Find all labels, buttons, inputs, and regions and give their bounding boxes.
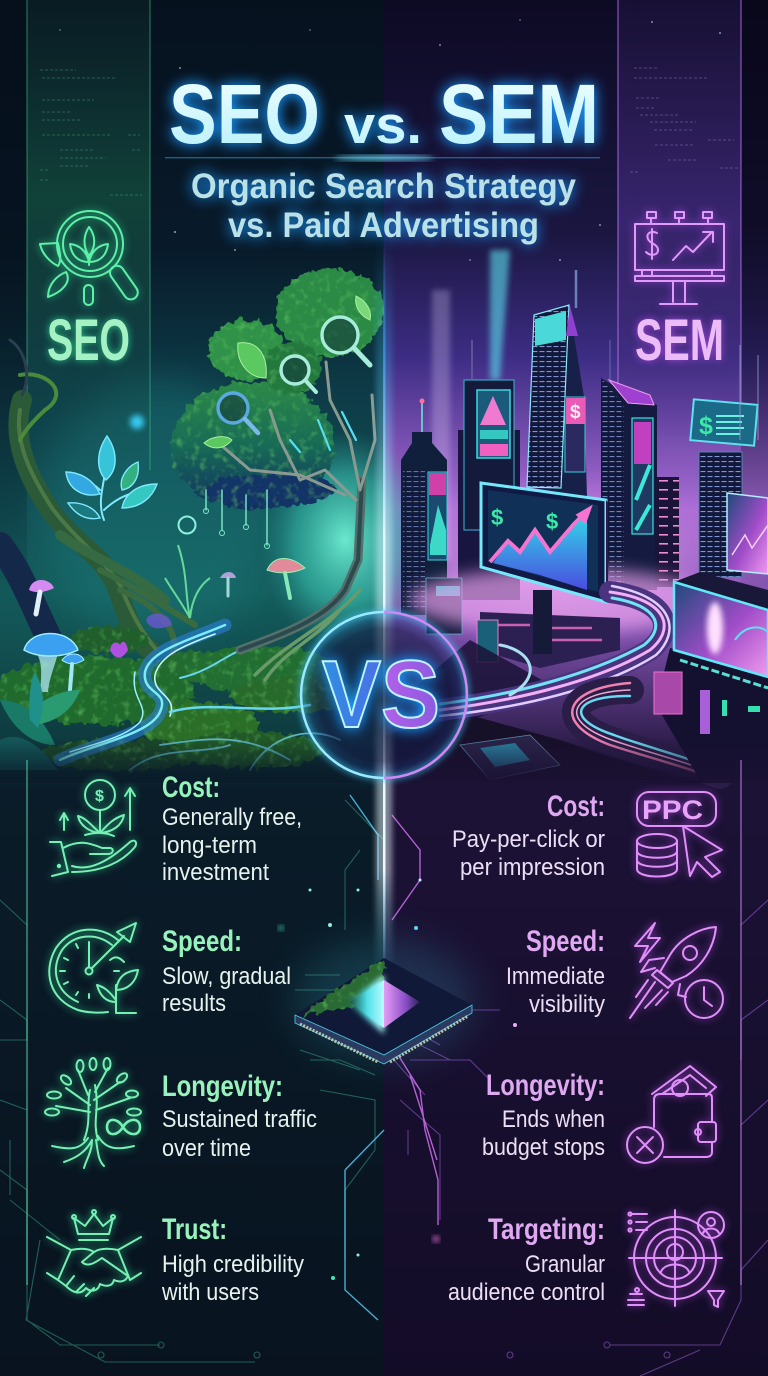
row: SEO longevity bbox=[45, 1058, 317, 1168]
text: SEO trust: with users bbox=[161, 1279, 259, 1306]
icon: handshake with crown bbox=[47, 1210, 141, 1296]
icon: PPC button, coins and cursor bbox=[637, 792, 722, 877]
circuit traces: right bright violet bbox=[392, 815, 438, 1225]
heading: SEM targeting: Targeting: bbox=[488, 1213, 605, 1246]
soft fade from scene into lower panels bbox=[0, 738, 768, 783]
corner tower with neon sign bbox=[601, 340, 679, 590]
heading: SEM speed: Speed: bbox=[526, 925, 605, 958]
text: SEM longevity bbox=[482, 1106, 605, 1161]
text: SEM cost: per impression bbox=[460, 854, 605, 881]
row: SEO cost bbox=[50, 771, 302, 886]
panel: SEO side column bbox=[27, 0, 150, 470]
text: SEO longevity: Sustained traffic bbox=[162, 1106, 317, 1133]
text: SEM speed bbox=[506, 963, 605, 1018]
mushrooms bbox=[24, 558, 305, 692]
glowing sapling bbox=[66, 436, 157, 520]
stepped tower left bbox=[401, 398, 462, 634]
particle dots near the centre bbox=[278, 878, 517, 1280]
text: SEO longevity bbox=[162, 1106, 317, 1162]
starfield bbox=[59, 19, 721, 261]
magnifying glasses in foliage bbox=[218, 317, 370, 433]
text: SEO speed: results bbox=[162, 990, 226, 1017]
vertical centre light seam bbox=[376, 240, 392, 980]
lower left low-rise bbox=[477, 612, 620, 668]
circuit traces: right lower background bbox=[394, 900, 768, 1376]
circuit accent: right side vertical border bbox=[740, 760, 742, 1285]
text: SEM targeting: audience control bbox=[448, 1279, 605, 1306]
row: SEO trust bbox=[47, 1210, 304, 1306]
text: SEM longevity: budget stops bbox=[482, 1134, 605, 1161]
icon: tree with infinity bbox=[45, 1058, 141, 1168]
icon: hand with coin plant: $ bbox=[95, 788, 104, 805]
icon: wallet with cash and cross bbox=[627, 1066, 716, 1163]
title: vs. bbox=[344, 96, 422, 155]
text: SEM cost: Pay-per-click or bbox=[452, 826, 605, 853]
VS badge bbox=[301, 612, 467, 778]
heading: SEM longevity: Longevity: bbox=[486, 1069, 605, 1102]
main billboard with growth chart: $ bbox=[546, 509, 558, 534]
text: SEO cost bbox=[162, 804, 302, 886]
tall tower with dollar banner: $ bbox=[570, 402, 581, 423]
icon: SEM billboard bbox=[635, 212, 724, 304]
circuit traces: left bright blue bbox=[345, 795, 384, 1320]
row: SEO speed bbox=[49, 923, 291, 1017]
heading: SEO trust: Trust: bbox=[162, 1213, 227, 1246]
SEO label: SEO bbox=[47, 308, 130, 373]
title: SEO bbox=[169, 67, 320, 161]
text: SEM speed: Immediate bbox=[506, 963, 605, 990]
tree trunk and circuit branches bbox=[204, 362, 375, 680]
leaves on tree bbox=[204, 296, 370, 448]
tree foliage bbox=[171, 268, 384, 510]
foreground leaves and grasses bbox=[0, 415, 210, 770]
text: SEO cost: long-term bbox=[162, 832, 257, 859]
panel: SEM side column bbox=[618, 0, 741, 440]
chip at the base of the seam bbox=[294, 940, 474, 1064]
row: SEM cost bbox=[452, 790, 722, 881]
glowing river bbox=[60, 625, 340, 770]
text: SEO longevity: over time bbox=[162, 1135, 251, 1162]
right building and dollar sign panel: $ bbox=[699, 412, 713, 440]
text: SEM targeting: Granular bbox=[525, 1251, 605, 1278]
icon: audience target bbox=[628, 1210, 724, 1307]
row: SEM targeting bbox=[448, 1210, 724, 1307]
mossy ground bbox=[0, 626, 360, 771]
stand for main billboard bbox=[533, 590, 552, 654]
icon: hand with coin plant bbox=[50, 780, 136, 876]
light beams bbox=[432, 250, 510, 560]
dark lower city blocks bbox=[390, 640, 628, 780]
right chart screen bbox=[727, 493, 768, 574]
tall tower with dollar banner bbox=[527, 270, 587, 497]
title divider bbox=[165, 156, 600, 160]
title bbox=[169, 67, 599, 161]
neon highways bbox=[440, 586, 720, 780]
subtitle: vs. Paid Advertising bbox=[228, 206, 539, 245]
illustration: organic forest scene bbox=[0, 268, 384, 771]
text: SEO cost: investment bbox=[162, 859, 269, 886]
text: SEO trust: High credibility bbox=[162, 1251, 304, 1278]
left gnarled tree trunk bbox=[0, 340, 195, 665]
text: SEM speed: visibility bbox=[529, 991, 605, 1018]
text: SEM targeting bbox=[448, 1251, 605, 1306]
row: SEM speed bbox=[506, 923, 723, 1018]
text: SEM cost bbox=[452, 826, 605, 881]
text: SEO speed bbox=[162, 963, 291, 1017]
icon: rocket, bolt and clock bbox=[630, 923, 723, 1018]
panel: SEO attributes bbox=[45, 771, 317, 1306]
heading: SEO longevity: Longevity: bbox=[162, 1070, 283, 1103]
lower right large screen and building bbox=[654, 572, 768, 780]
icon: PPC button, coins and cursor: PPC bbox=[642, 795, 703, 825]
text: SEM longevity: Ends when bbox=[502, 1106, 605, 1133]
icon: clock with arrow and sprout bbox=[49, 923, 138, 1013]
panel: SEM attributes bbox=[448, 790, 724, 1307]
main billboard with growth chart: $ bbox=[491, 505, 503, 530]
row: SEM longevity bbox=[482, 1066, 716, 1163]
circuit traces: left lower background bbox=[0, 800, 384, 1362]
chip body bbox=[295, 958, 472, 1064]
heading: SEM cost: Cost: bbox=[547, 790, 605, 823]
chip glowing core bbox=[348, 975, 420, 1034]
icon: SEO magnifier with plant bbox=[40, 211, 141, 305]
VS lettering: VS bbox=[322, 641, 440, 748]
heading: SEO speed: Speed: bbox=[162, 925, 242, 958]
subtitle: Organic Search Strategy bbox=[191, 167, 577, 206]
heading: SEO cost: Cost: bbox=[162, 771, 220, 804]
pink haze at the city base bbox=[410, 568, 710, 632]
subtitle bbox=[191, 167, 577, 245]
SEM label: SEM bbox=[635, 308, 724, 373]
text: SEO trust bbox=[161, 1251, 304, 1306]
title: SEM bbox=[439, 67, 599, 161]
skyscraper with warning screen bbox=[458, 340, 520, 600]
main billboard with growth chart bbox=[481, 483, 608, 602]
illustration: neon city scene bbox=[384, 250, 768, 780]
right building and dollar sign panel bbox=[690, 345, 758, 577]
text: SEO speed: Slow, gradual bbox=[162, 963, 291, 990]
text: SEO cost: Generally free, bbox=[162, 804, 302, 831]
circuit accent: left side vertical border bbox=[26, 760, 28, 1285]
